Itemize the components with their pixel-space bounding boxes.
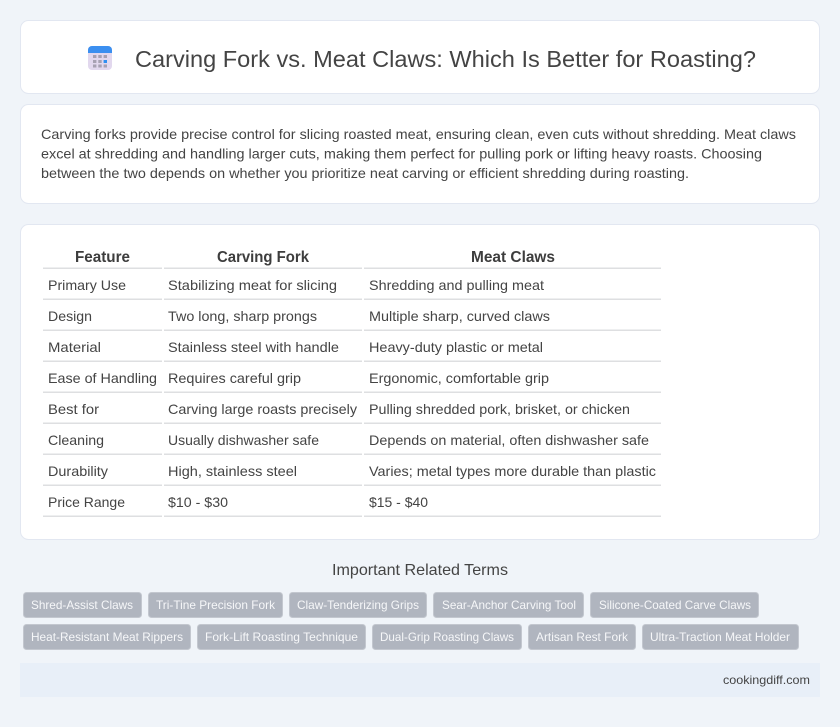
row: material bbox=[48, 339, 543, 355]
tag bbox=[528, 624, 636, 650]
text block: introduction: Carving forks provide precise control for slicing roasted meat, ensuring clean, even cuts without shredding. Meat claws bbox=[41, 126, 796, 142]
row: design: Two long, sharp prongs bbox=[168, 308, 317, 324]
row: cleaning: Usually dishwasher safe bbox=[168, 432, 319, 448]
tag: Fork-Lift Roasting Technique bbox=[205, 630, 358, 644]
row: cleaning bbox=[48, 432, 649, 448]
tag: Heat-Resistant Meat Rippers bbox=[31, 630, 183, 644]
row: durability: Varies; metal types more durable than plastic bbox=[369, 463, 656, 479]
row: ease of handling bbox=[48, 370, 549, 386]
tag bbox=[24, 592, 142, 618]
row: price range bbox=[48, 494, 428, 510]
row: best for: Pulling shredded pork, brisket, or chicken bbox=[369, 401, 630, 417]
row: design: Design bbox=[48, 308, 92, 324]
row: ease of handling: Ease of Handling bbox=[48, 370, 157, 386]
row: best for: Best for bbox=[48, 401, 99, 417]
tag bbox=[434, 592, 584, 618]
tag bbox=[642, 624, 798, 650]
tag: Dual-Grip Roasting Claws bbox=[380, 630, 514, 644]
tag: Tri-Tine Precision Fork bbox=[156, 598, 276, 612]
tag: Silicone-Coated Carve Claws bbox=[599, 598, 751, 612]
row: price range: $10 - $30 bbox=[168, 494, 228, 510]
row: durability bbox=[48, 463, 656, 479]
tag: Claw-Tenderizing Grips bbox=[297, 598, 419, 612]
row: cleaning: Depends on material, often dishwasher safe bbox=[369, 432, 649, 448]
icon: calendar bbox=[88, 46, 112, 70]
row: primary use bbox=[48, 277, 544, 293]
tag: Artisan Rest Fork bbox=[536, 630, 629, 644]
tag bbox=[372, 624, 522, 650]
row: material: Material bbox=[48, 339, 101, 355]
row: cleaning: Cleaning bbox=[48, 432, 104, 448]
heading: important related terms: Important Related Terms bbox=[332, 562, 508, 579]
footer source text: cookingdiff.com bbox=[723, 673, 810, 687]
table header: Meat Claws bbox=[471, 249, 555, 266]
row: primary use: Shredding and pulling meat bbox=[369, 277, 544, 293]
tags: related terms bbox=[24, 592, 798, 650]
panel: header bbox=[20, 20, 820, 94]
row: price range: $15 - $40 bbox=[369, 494, 428, 510]
tag bbox=[590, 592, 758, 618]
footer bbox=[20, 663, 820, 697]
row: durability: High, stainless steel bbox=[168, 463, 297, 479]
row: primary use: Stabilizing meat for slicing bbox=[168, 277, 337, 293]
panel: comparison table bbox=[20, 224, 820, 540]
text block: introduction: excel at shredding and handling larger cuts, making them perfect for pulling pork or lifting heavy roasts. Choosing bbox=[41, 146, 762, 162]
table header: Carving Fork bbox=[217, 249, 309, 266]
table header bbox=[75, 249, 555, 266]
row: primary use: Primary Use bbox=[48, 277, 126, 293]
row: best for bbox=[48, 401, 630, 417]
row: design bbox=[48, 308, 550, 324]
title: Carving Fork vs. Meat Claws: Which Is Better for Roasting? bbox=[135, 46, 756, 72]
row: ease of handling: Ergonomic, comfortable grip bbox=[369, 370, 549, 386]
table header: Feature bbox=[75, 249, 130, 266]
text block: introduction bbox=[41, 126, 796, 181]
row: best for: Carving large roasts precisely bbox=[168, 401, 357, 417]
tag: Ultra-Traction Meat Holder bbox=[650, 630, 790, 644]
row: ease of handling: Requires careful grip bbox=[168, 370, 301, 386]
tag bbox=[198, 624, 366, 650]
tag bbox=[24, 624, 190, 650]
tag: Shred-Assist Claws bbox=[31, 598, 133, 612]
row: durability: Durability bbox=[48, 463, 108, 479]
row: material: Stainless steel with handle bbox=[168, 339, 339, 355]
tag bbox=[290, 592, 426, 618]
row: price range: Price Range bbox=[48, 494, 125, 510]
row: material: Heavy-duty plastic or metal bbox=[369, 339, 543, 355]
tag: Sear-Anchor Carving Tool bbox=[442, 598, 576, 612]
row: design: Multiple sharp, curved claws bbox=[369, 308, 550, 324]
text block: introduction: between the two depends on whether you prioritize neat carving or efficient shredding during roasting. bbox=[41, 165, 689, 181]
panel: introduction bbox=[20, 104, 820, 204]
tag bbox=[148, 592, 282, 618]
